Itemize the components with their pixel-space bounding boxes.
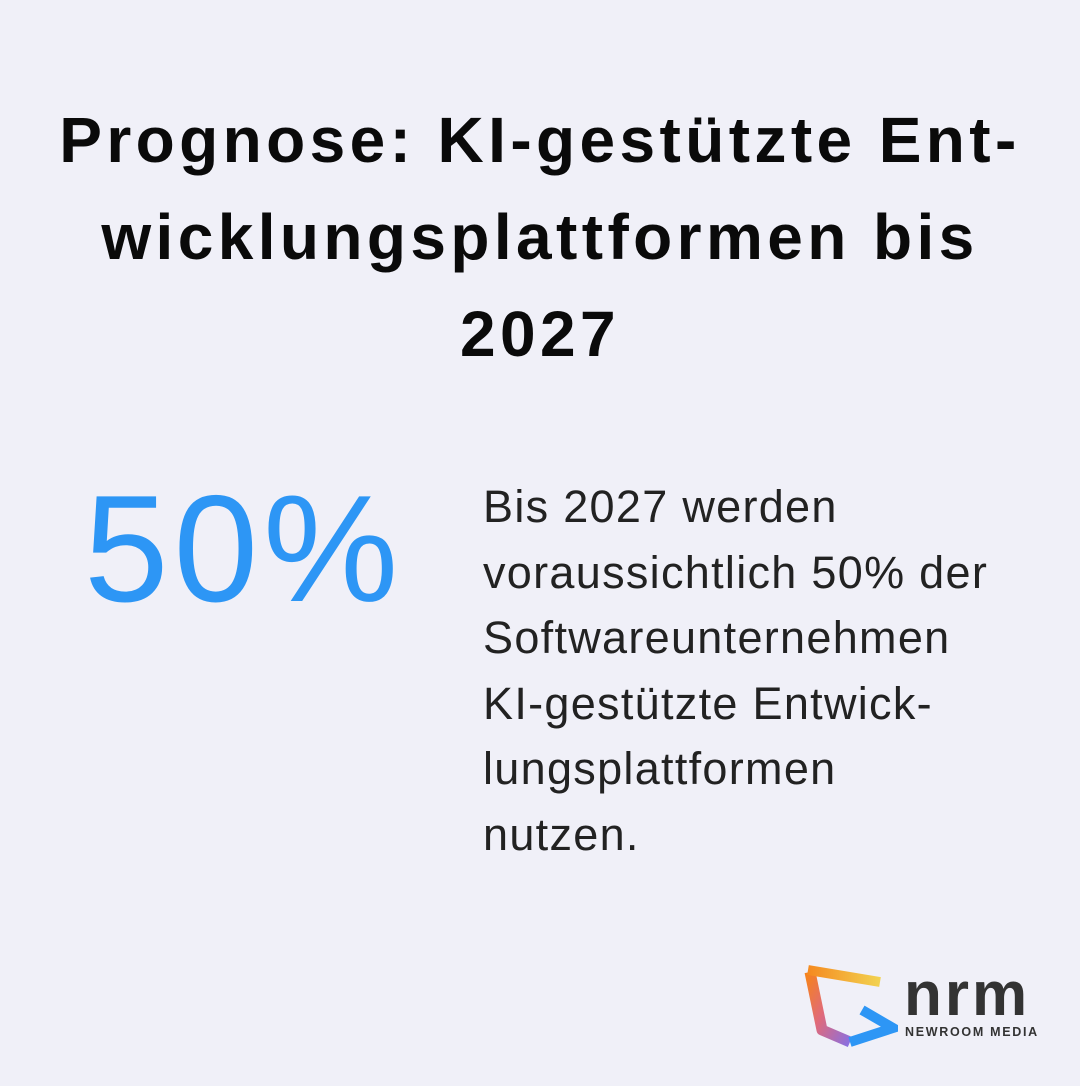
body text: KI-gestützte Entwick-: [483, 678, 933, 728]
body text: Bis 2027 werden: [483, 481, 838, 532]
body text: nutzen.: [483, 808, 640, 860]
title: [59, 104, 1021, 370]
logo: NEWROOM MEDIA: [905, 1025, 1039, 1039]
title: wicklungsplattformen bis: [101, 201, 979, 273]
body text: Softwareunternehmen: [483, 612, 950, 663]
body text: lungsplattformen: [483, 743, 836, 794]
title: Prognose: KI-gestützte Ent-: [59, 104, 1021, 176]
icon: logo mark: [804, 965, 898, 1047]
body text: voraussichtlich 50% der: [483, 546, 988, 598]
big stat: 50%: [84, 464, 403, 634]
logo text: nrm: [904, 960, 1030, 1029]
title: 2027: [460, 298, 620, 370]
body text: [483, 481, 988, 860]
logo: [804, 960, 1039, 1047]
